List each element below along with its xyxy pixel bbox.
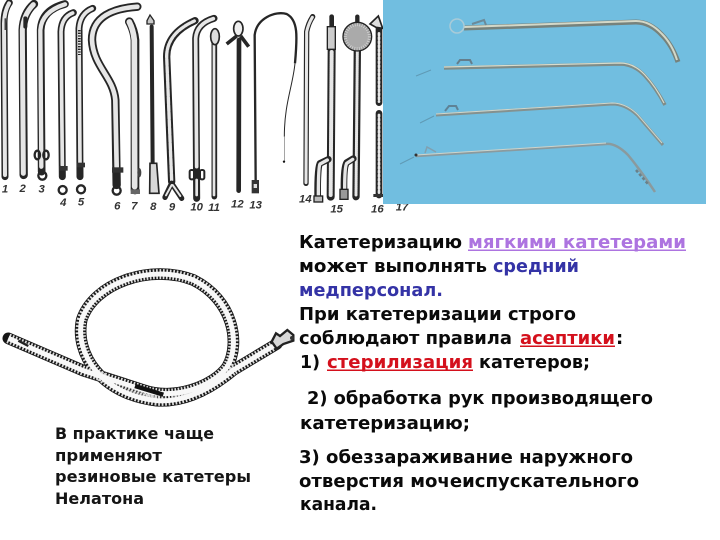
catheter number labels: 6 bbox=[114, 200, 121, 212]
catheter 8 bbox=[147, 15, 159, 193]
text block: rule 2: катетеризацию; bbox=[300, 413, 470, 434]
text block: rule 2: 2) обработка рук производящего bbox=[307, 388, 653, 409]
metal catheter 3 bbox=[420, 103, 663, 145]
catheter number labels: 12 bbox=[231, 198, 244, 210]
text block: rule 3: отверстия мочеиспускательного bbox=[299, 471, 639, 492]
text block: who performs catheterization and asepsis rules: средний bbox=[493, 256, 579, 277]
catheter 17 bbox=[370, 16, 383, 197]
catheter number labels: 9 bbox=[169, 202, 176, 214]
metal catheter 1 bbox=[450, 19, 678, 62]
catheter number labels: 13 bbox=[249, 199, 263, 211]
catheter number labels: 5 bbox=[78, 196, 85, 208]
panel: Nelaton rubber catheter drawing bbox=[8, 274, 293, 401]
panel: photo of metal catheters bbox=[383, 0, 706, 204]
catheter number labels: 2 bbox=[19, 183, 27, 195]
text block: who performs catheterization and asepsis rules: стерилизация bbox=[327, 352, 473, 373]
catheter 13 bbox=[252, 13, 296, 193]
catheter 16 with balloon bbox=[340, 17, 372, 199]
caption: Nelaton catheters: резиновые катетеры bbox=[55, 467, 251, 486]
catheter 9 bbox=[165, 21, 195, 198]
catheter 14 bbox=[306, 17, 313, 183]
metal catheter 4 bbox=[400, 143, 655, 192]
text block: who performs catheterization and asepsis rules: : bbox=[616, 328, 623, 349]
catheter number labels: 15 bbox=[330, 204, 344, 216]
metal catheter 2 bbox=[416, 60, 665, 105]
text block: rule 3 bbox=[299, 447, 639, 515]
catheter 2 bbox=[22, 4, 34, 175]
text block: rule 3: канала. bbox=[300, 494, 377, 515]
catheter number labels: 16 bbox=[371, 204, 384, 216]
text block: who performs catheterization and asepsis rules: При катетеризации строго bbox=[299, 304, 576, 325]
text block: who performs catheterization and asepsis rules: Катетеризацию bbox=[299, 232, 462, 253]
catheter number labels: 7 bbox=[131, 200, 138, 212]
text block: rule 2 bbox=[300, 388, 653, 434]
text block: who performs catheterization and asepsis rules bbox=[290, 232, 686, 373]
catheter 11 bbox=[211, 29, 219, 197]
catheter 12 bbox=[227, 21, 249, 191]
caption: Nelaton catheters: В практике чаще bbox=[55, 424, 214, 443]
catheter 4 bbox=[59, 13, 73, 194]
text block: who performs catheterization and asepsis rules: 1) bbox=[300, 352, 320, 373]
catheter number labels: 10 bbox=[190, 202, 204, 214]
catheter number labels: 4 bbox=[59, 197, 67, 209]
caption: Nelaton catheters: применяют bbox=[55, 446, 163, 465]
panel: catheter drawings bbox=[2, 3, 409, 216]
catheter number labels: 8 bbox=[150, 201, 157, 213]
catheter 6 bbox=[92, 7, 137, 195]
caption: Nelaton catheters: Нелатона bbox=[55, 489, 144, 508]
catheter number labels: 1 bbox=[2, 184, 8, 196]
catheter 5 bbox=[77, 8, 93, 193]
text block: who performs catheterization and asepsis rules: соблюдают правила bbox=[299, 328, 512, 349]
text block: who performs catheterization and asepsis rules: асептики bbox=[520, 328, 615, 349]
catheter 15 bbox=[314, 17, 335, 202]
catheter number labels: 17 bbox=[396, 202, 409, 214]
catheter 3 bbox=[35, 4, 65, 180]
catheter 1 bbox=[4, 3, 9, 177]
catheter number labels: 11 bbox=[208, 202, 220, 214]
text block: who performs catheterization and asepsis rules: медперсонал. bbox=[299, 280, 443, 301]
catheter 10 bbox=[190, 18, 214, 198]
catheter number labels: 14 bbox=[299, 193, 312, 205]
catheter 7 bbox=[129, 22, 141, 194]
text block: who performs catheterization and asepsis rules: мягкими катетерами bbox=[468, 232, 686, 253]
text block: rule 3: 3) обеззараживание наружного bbox=[299, 447, 633, 468]
catheter number labels: 3 bbox=[39, 184, 46, 196]
caption: Nelaton catheters bbox=[55, 424, 251, 508]
text block: who performs catheterization and asepsis rules: катетеров; bbox=[479, 352, 590, 373]
catheter number labels bbox=[2, 183, 409, 216]
text block: who performs catheterization and asepsis rules: может выполнять bbox=[299, 256, 487, 277]
